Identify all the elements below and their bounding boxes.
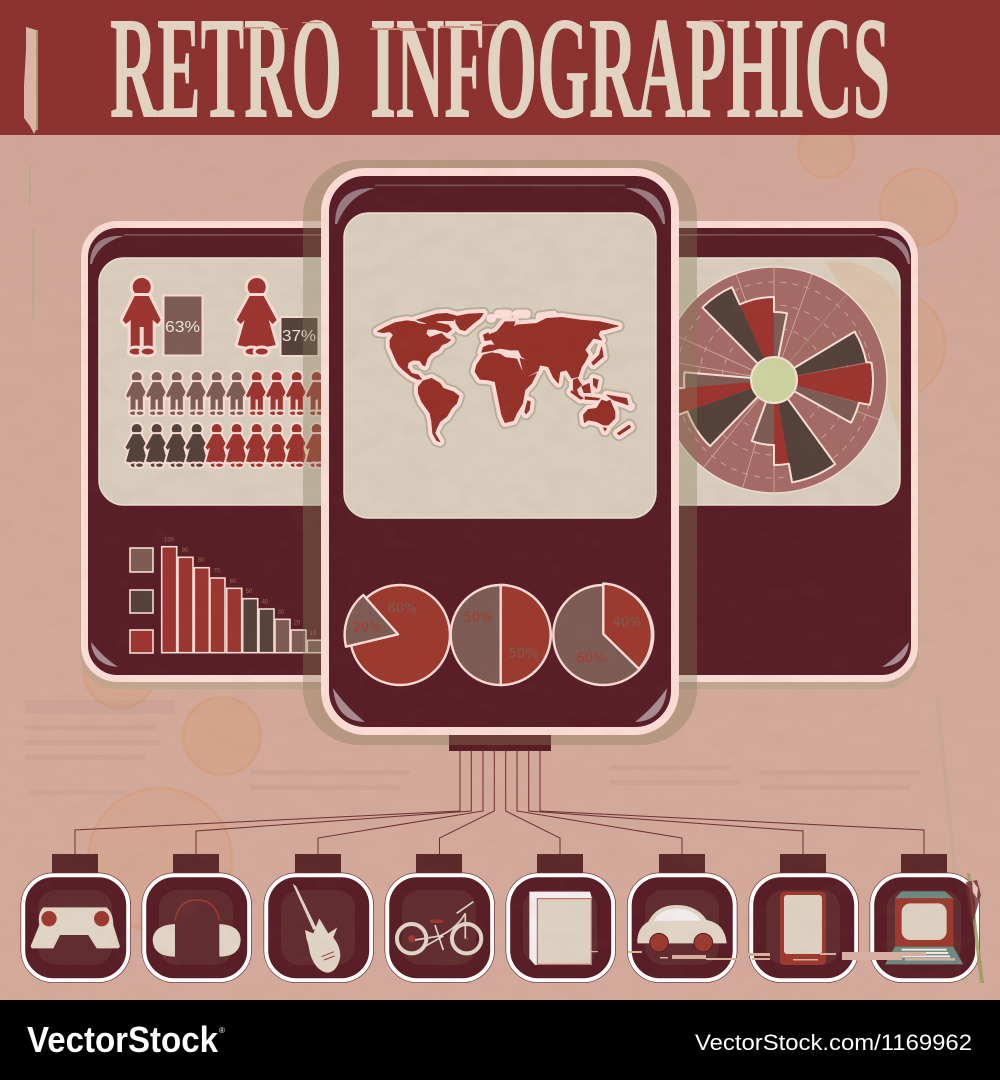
panel: right phone: [494, 224, 919, 689]
bar value labels: 80: [198, 558, 205, 564]
title: [110, 0, 890, 148]
icon tile: laptop: [870, 854, 980, 983]
bar value labels: 100: [164, 538, 175, 544]
chart hub: [751, 357, 797, 403]
bar value labels: 40: [262, 600, 269, 606]
coffee stains: [84, 122, 956, 932]
connector wires: [75, 750, 924, 854]
pie chart: 40 / 60: 60%: [577, 652, 605, 666]
chart wedges: [669, 287, 873, 482]
bar value labels: 20: [294, 620, 301, 626]
chart grid: [661, 267, 880, 493]
pie chart: 80 / 20: 80%: [388, 602, 416, 616]
people chart: men row: [126, 372, 327, 415]
icon tile: bicycle: [384, 854, 495, 983]
bar chart: [162, 538, 322, 653]
watermark footer: ®: [219, 1026, 225, 1035]
bar value labels: 70: [214, 568, 221, 574]
radial rose chart: [661, 267, 887, 493]
bar value labels: 90: [182, 548, 189, 554]
icon tile: book: [506, 854, 616, 983]
connector block: [449, 735, 551, 751]
scratch across icon tiles: [590, 951, 955, 960]
icon tile: game controller: [20, 854, 131, 983]
watermark footer: VectorStock: [27, 1019, 219, 1060]
title band: [0, 0, 1000, 148]
people chart: women row: [126, 424, 328, 467]
bar value labels: [164, 538, 317, 637]
icon: man with 63% bar: 63%: [165, 319, 200, 336]
icon: woman with 37% bar: [237, 278, 318, 356]
corner highlights: [335, 188, 375, 224]
wedge outlines: [669, 287, 873, 482]
world map: [377, 313, 631, 442]
pie chart: 80 / 20: [345, 585, 450, 685]
panel: center phone: [325, 172, 675, 731]
pie chart: 50 / 50: [451, 585, 551, 685]
icon tile: car: [627, 854, 738, 983]
icon tile: tablet: [748, 854, 859, 983]
watermark footer: VectorStock.com/1169962: [695, 1030, 972, 1055]
bar value labels: 10: [310, 631, 317, 637]
pie chart: 80 / 20: 20%: [353, 620, 381, 636]
left scratch marks: [29, 165, 968, 985]
panel: left phone: [80, 224, 504, 689]
bar value labels: 60: [230, 579, 237, 585]
pie chart: 50 / 50: 50%: [464, 610, 492, 626]
title band scratches: [24, 20, 724, 134]
bar value labels: 30: [278, 610, 285, 616]
faint newspaper ghost lines: [25, 700, 920, 795]
pie chart: 40 / 60: 40%: [613, 616, 641, 630]
pie chart: 50 / 50: 50%: [509, 646, 537, 662]
legend squares: [130, 548, 153, 653]
icon: woman with 37% bar: 37%: [282, 328, 316, 345]
icon tile: headphones: [142, 854, 252, 983]
pie chart: 40 / 60: [553, 584, 653, 685]
bar value labels: 50: [246, 589, 253, 595]
icon: man with 63% bar: [123, 278, 202, 356]
watermark footer: [0, 1000, 1000, 1080]
icon tile: guitar: [264, 854, 374, 983]
screen: map: [344, 213, 656, 518]
center phone halo: [303, 160, 697, 745]
olive scratch at right: [966, 873, 984, 983]
